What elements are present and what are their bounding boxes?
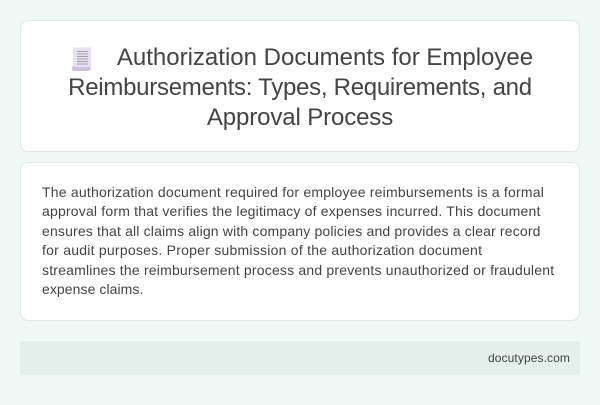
text block: description: approval form that verifies the legitimacy of expenses incurred. This document	[42, 203, 541, 219]
panel: description	[20, 162, 580, 321]
heading	[68, 44, 533, 131]
text block: description: for audit purposes. Proper submission of the authorization document	[42, 242, 482, 258]
heading: Reimbursements: Types, Requirements, and	[68, 74, 532, 101]
text block: description: streamlines the reimbursement process and prevents unauthorized or fraudulent	[42, 262, 554, 278]
panel: title	[20, 20, 580, 152]
heading: Authorization Documents for Employee	[117, 44, 533, 71]
text block: description: expense claims.	[42, 281, 143, 297]
footer	[20, 341, 580, 375]
text block: description	[42, 184, 554, 297]
footer text: docutypes.com	[488, 351, 570, 365]
heading: Approval Process	[207, 104, 393, 131]
text block: description: ensures that all claims align with company policies and provides a clear record	[42, 223, 541, 239]
text block: description: The authorization document required for employee reimbursements is a formal	[42, 184, 544, 200]
icon: document	[72, 47, 91, 71]
